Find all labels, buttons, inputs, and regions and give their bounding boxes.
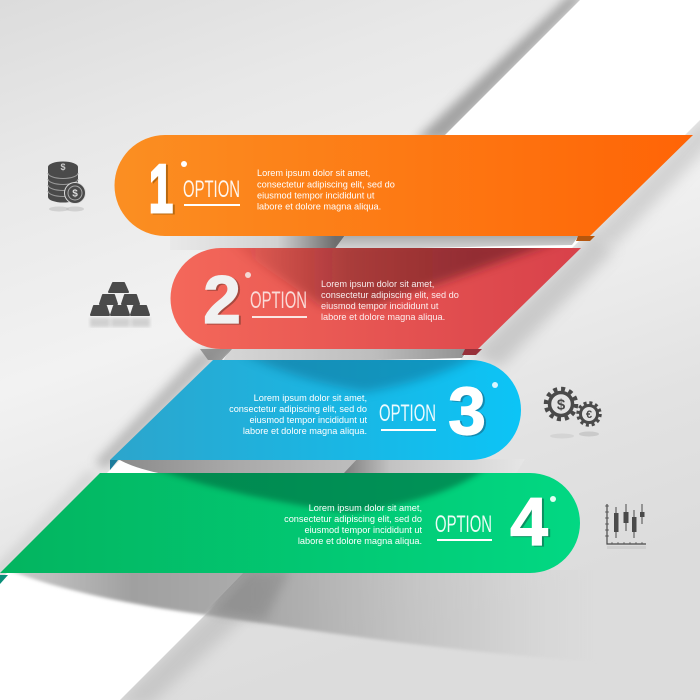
panel: option 3	[110, 352, 521, 470]
description: consectetur adipiscing elit, sed do	[229, 404, 367, 414]
description: Lorem ipsum dolor sit amet,	[257, 168, 370, 178]
description: consectetur adipiscing elit, sed do	[284, 514, 422, 524]
description: labore et dolore magna aliqua.	[243, 426, 367, 436]
panel: option 4	[0, 465, 580, 584]
shadow under green banner	[12, 573, 520, 653]
description: eiusmod tempor incididunt ut	[257, 190, 375, 200]
icon: coins: $	[72, 188, 78, 200]
description: Lorem ipsum dolor sit amet,	[321, 279, 434, 289]
green ribbon fold	[0, 575, 8, 584]
number 4: 4	[510, 484, 548, 560]
red banner	[170, 248, 581, 349]
option heading: OPTION	[435, 511, 492, 538]
shadow strip between blue and green	[118, 459, 525, 475]
number 1: 1	[151, 152, 175, 228]
icon: gears	[546, 389, 600, 438]
option heading: OPTION	[379, 400, 436, 427]
orange ribbon fold	[576, 236, 595, 241]
option heading: OPTION	[250, 287, 307, 314]
number 1: 1	[149, 151, 173, 227]
icon: candlestick chart	[605, 504, 646, 549]
description: eiusmod tempor incididunt ut	[321, 301, 439, 311]
icon: gold bars	[90, 283, 150, 327]
blue banner	[110, 360, 521, 460]
option heading: OPTION	[183, 176, 240, 203]
dot	[550, 496, 556, 502]
icon: gears: $	[557, 396, 566, 414]
dot	[181, 161, 187, 167]
description: Lorem ipsum dolor sit amet,	[254, 393, 367, 403]
green banner shadow	[159, 473, 484, 516]
green banner	[0, 473, 580, 573]
panel: option 2	[170, 240, 581, 355]
number 1	[149, 151, 175, 228]
description: Lorem ipsum dolor sit amet,	[309, 503, 422, 513]
shadow strip between orange and red	[170, 234, 580, 250]
description: eiusmod tempor incididunt ut	[305, 525, 422, 535]
description: labore et dolore magna aliqua.	[321, 312, 445, 322]
blue ribbon fold	[110, 460, 118, 470]
underline	[381, 429, 436, 431]
underline	[437, 539, 492, 541]
description: consectetur adipiscing elit, sed do	[321, 290, 459, 300]
red ribbon fold	[462, 349, 482, 355]
icon: coins: $	[60, 162, 66, 172]
number 3: 3	[450, 374, 488, 450]
description: eiusmod tempor incididunt ut	[250, 415, 367, 425]
number 4: 4	[512, 485, 550, 561]
description: labore et dolore magna aliqua.	[298, 536, 422, 546]
shadow strip between red and blue	[200, 347, 470, 362]
blue banner shadow	[250, 360, 478, 396]
description: consectetur adipiscing elit, sed do	[257, 179, 395, 189]
underline	[184, 204, 240, 206]
dot	[492, 382, 498, 388]
icon: coins	[48, 162, 86, 212]
underline	[252, 316, 307, 318]
red banner shadow	[241, 248, 552, 310]
panel: option 1	[114, 135, 693, 241]
number 3: 3	[448, 373, 486, 449]
number 2: 2	[205, 263, 243, 339]
dot	[245, 272, 251, 278]
icon: gears: €	[586, 409, 592, 421]
description: labore et dolore magna aliqua.	[257, 202, 381, 212]
orange banner	[114, 135, 693, 236]
number 2: 2	[203, 262, 241, 338]
